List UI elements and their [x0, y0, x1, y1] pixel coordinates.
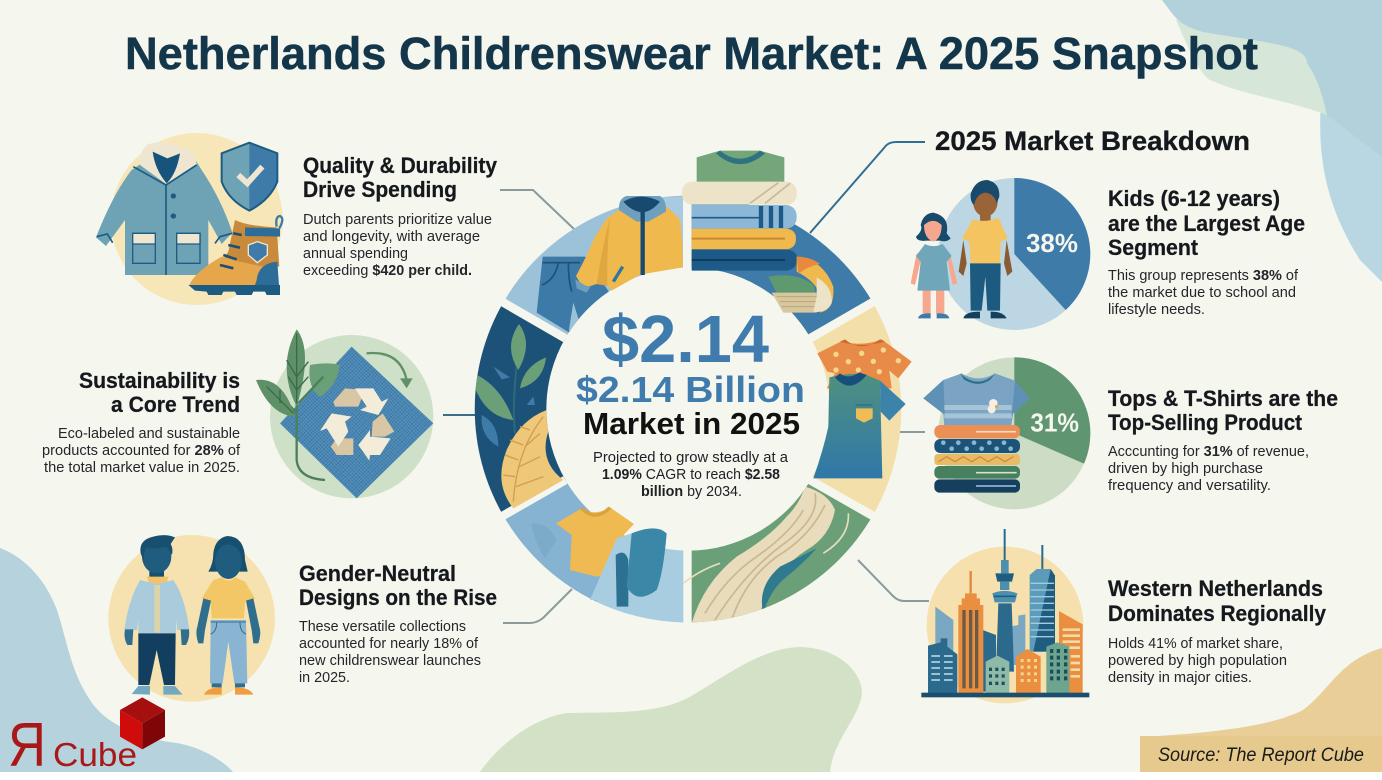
illustration: stacked tees [813, 339, 912, 478]
body text: Acccunting for 31% of revenue, [1108, 444, 1309, 460]
heading [299, 561, 497, 610]
icon: red cube [120, 697, 165, 749]
connector: breakdown to ring [810, 142, 925, 233]
source note: Source: The Report Cube [1158, 745, 1364, 766]
heading: Top-Selling Product [1108, 410, 1303, 435]
body text: annual spending [303, 246, 408, 262]
body text [303, 212, 492, 279]
body text [299, 619, 481, 686]
connector: tops to ring [898, 431, 925, 433]
connector: region to ring [858, 560, 929, 601]
heading: Segment [1108, 235, 1199, 260]
title: Netherlands Childrenswear Market: A 2025 Snapshot [125, 28, 1258, 79]
illustration: woven fibre swirl [683, 487, 848, 623]
body text: exceeding $420 per child. [303, 263, 472, 279]
heading: Quality & Durability [303, 153, 498, 178]
ring segment: bottom right green [688, 480, 873, 622]
icon: shield [222, 143, 277, 211]
chart: 38 percent pie with children [911, 178, 1090, 330]
heading [303, 153, 498, 202]
body text [1108, 636, 1287, 686]
heading: Tops & T-Shirts are the [1108, 386, 1338, 411]
panel: kids age segment [911, 178, 1305, 330]
front block: green right [1046, 642, 1069, 693]
panel: tops and t-shirts [923, 357, 1338, 509]
connector: gender to ring [503, 589, 572, 623]
ring segment: top right blue [688, 196, 873, 338]
body text: driven by high purchase [1108, 461, 1263, 477]
figure: girl [196, 536, 260, 695]
panel: sustainability [42, 329, 433, 498]
icon: recycled fabric and leaves [256, 329, 433, 498]
heading [79, 368, 240, 417]
body text: Eco-labeled and sustainable [58, 426, 240, 442]
heading [1108, 576, 1327, 626]
glass tower [1030, 545, 1055, 652]
front block: orange [1016, 649, 1041, 693]
panel: quality and durability [96, 133, 498, 305]
figure: girl [911, 213, 957, 318]
wordmark Cube: Cube [53, 736, 137, 773]
heading: 2025 market breakdown: 2025 Market Breakdown [935, 126, 1250, 156]
panel: central donut ring [470, 151, 912, 627]
ring segment: left navy [475, 302, 565, 516]
connector: durability to ring [500, 190, 574, 229]
left dark block [928, 638, 957, 693]
centre body copy: 1.09% CAGR to reach $2.58 [602, 467, 780, 483]
heading: are the Largest Age [1108, 211, 1305, 236]
heading: Sustainability is [79, 368, 240, 393]
illustration: plant leaves [470, 324, 563, 508]
heading: Western Netherlands [1108, 576, 1323, 601]
body text: Dutch parents prioritize value [303, 212, 492, 228]
body text: This group represents 38% of [1108, 268, 1299, 284]
chart: 31 percent pie with shirts [923, 357, 1090, 509]
ring segment: bottom left blue [503, 480, 688, 622]
body text [42, 426, 241, 476]
value label: $2.14 Billion [576, 369, 805, 410]
heading: Kids (6-12 years) [1108, 186, 1280, 211]
front block: green left [986, 656, 1009, 693]
tall orange tower [958, 571, 983, 693]
body text: accounted for nearly 18% of [299, 636, 479, 652]
figure: boy [959, 180, 1012, 318]
logo: RCube [8, 697, 165, 780]
panel: western netherlands [921, 529, 1327, 703]
body text: products accounted for 28% of [42, 443, 241, 459]
heading: a Core Trend [111, 392, 240, 417]
icon: recycle symbol [320, 388, 394, 461]
illustration: tee and fabric [532, 507, 683, 623]
body text: powered by high population [1108, 653, 1287, 669]
wordmark mirrored R: Я [8, 711, 46, 780]
centre text block [576, 302, 805, 500]
body text: the total market value in 2025. [44, 460, 240, 476]
heading: Dominates Regionally [1108, 601, 1327, 626]
illustration: folded clothes stack [682, 151, 833, 313]
figure: boy [124, 535, 189, 695]
observation tower [992, 529, 1017, 672]
buildings back row [935, 607, 1083, 693]
icon: tee [923, 373, 1029, 427]
heading [1108, 386, 1338, 435]
ring segment: top left light blue [503, 196, 688, 338]
market heading: Market in 2025 [583, 406, 800, 441]
connector: sustainability to ring [443, 414, 476, 416]
centre body copy [593, 450, 789, 500]
body text: lifestyle needs. [1108, 302, 1205, 318]
heading: Gender-Neutral [299, 561, 456, 586]
big value: $2.14 [602, 302, 769, 377]
body text: These versatile collections [299, 619, 466, 635]
body text [1108, 268, 1299, 318]
icon: city skyline [921, 529, 1089, 703]
icon: folded stack [934, 425, 1020, 493]
centre body copy: billion by 2034. [641, 484, 742, 500]
body text: new childrenswear launches [299, 653, 481, 669]
icon: two children [108, 535, 275, 702]
illustration: pants and jacket [537, 196, 683, 333]
body text: Holds 41% of market share, [1108, 636, 1283, 652]
icon: coat, shield and boot [96, 133, 283, 305]
value: 31% [1030, 408, 1079, 438]
body text [1108, 444, 1309, 494]
body text: frequency and versatility. [1108, 478, 1271, 494]
body text: the market due to school and [1108, 285, 1296, 301]
ring segment: right cream [811, 302, 901, 516]
body text: and longevity, with average [303, 229, 480, 245]
heading: Drive Spending [303, 177, 457, 202]
panel: gender-neutral [108, 535, 497, 702]
centre body copy: Projected to grow steadly at a [593, 450, 789, 466]
body text: density in major cities. [1108, 670, 1252, 686]
value: 38% [1026, 228, 1078, 258]
body text: in 2025. [299, 670, 350, 686]
heading: Designs on the Rise [299, 585, 497, 610]
heading [1108, 186, 1305, 260]
icon: boot [188, 216, 282, 295]
